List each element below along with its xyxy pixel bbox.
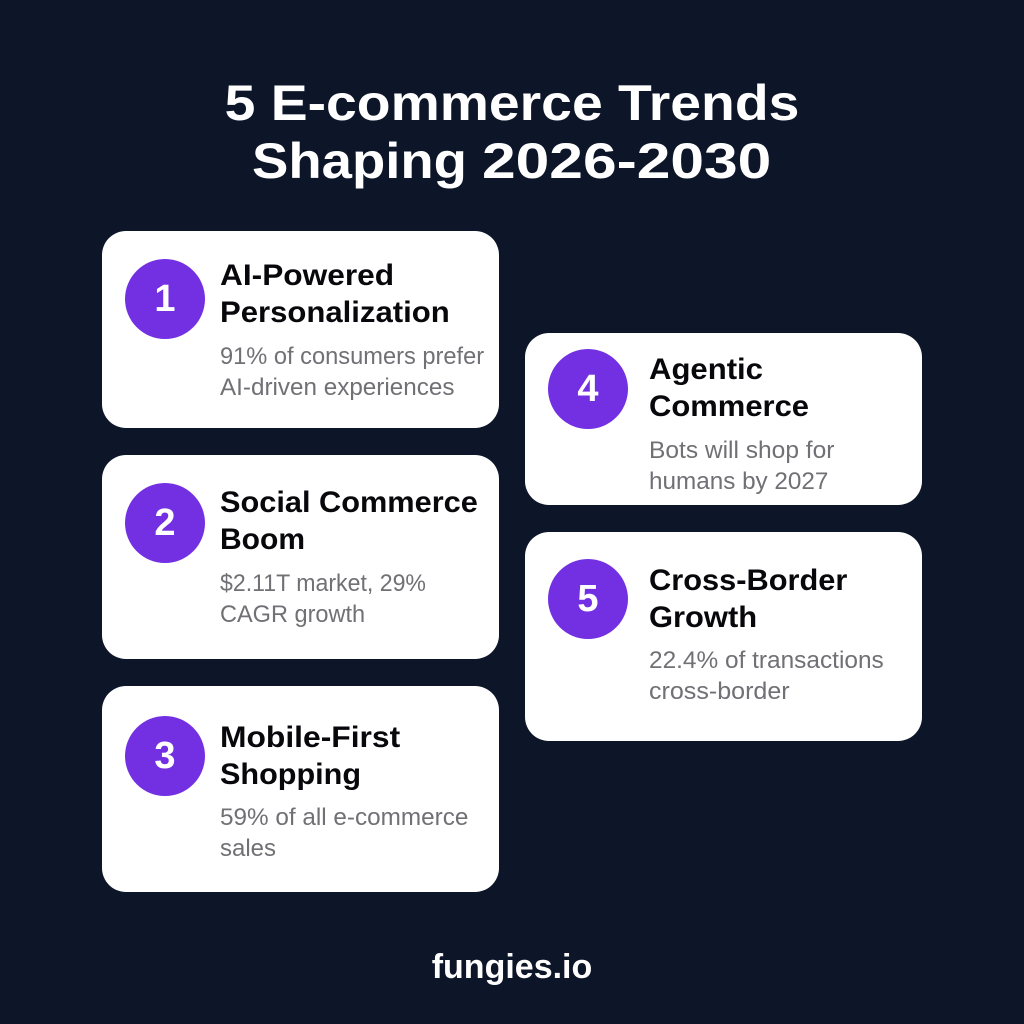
heading 2 [220,486,478,556]
description 2: CAGR growth [220,601,365,628]
title: 5 E-commerce Trends [225,75,799,131]
description 3 [220,804,468,862]
badge 4: 4 [577,368,599,410]
heading 4: Agentic [649,353,763,386]
description 1: 91% of consumers prefer [220,343,484,370]
description 5: 22.4% of transactions [649,647,884,674]
heading 4 [649,353,809,423]
badge 1 [125,259,205,339]
badge 3 [125,716,205,796]
heading 5 [649,564,847,634]
heading 4: Commerce [649,390,809,423]
heading 2: Boom [220,523,305,556]
badge 1: 1 [154,278,176,320]
title [225,75,799,189]
description 3: 59% of all e-commerce [220,804,468,831]
title: Shaping [252,133,467,189]
panel: trend 5 [525,532,922,741]
badge 3: 3 [154,735,176,777]
description 3: sales [220,835,276,862]
description 1: AI-driven experiences [220,374,454,401]
badge 5: 5 [577,578,599,620]
panel: trend 4 [525,333,922,505]
heading 1: Personalization [220,296,450,329]
panel: trend 3 [102,686,499,892]
heading 2: Social Commerce [220,486,478,519]
description 4: humans by 2027 [649,468,828,495]
heading 5: Cross-Border [649,564,847,597]
footer brand: fungies.io [432,948,592,986]
heading 1 [220,259,450,329]
badge 2: 2 [154,502,176,544]
heading 3 [220,721,400,791]
title: 2026-2030 [482,133,771,189]
panel: trend 2 [102,455,499,659]
heading 3: Mobile-First [220,721,400,754]
heading 1: AI-Powered [220,259,394,292]
badge 4 [548,349,628,429]
description 5: cross-border [649,678,790,705]
description 2 [220,570,426,628]
description 2: $2.11T market, 29% [220,570,426,597]
description 4: Bots will shop for [649,437,834,464]
heading 3: Shopping [220,758,361,791]
badge 5 [548,559,628,639]
description 5 [649,647,884,705]
panel: trend 1 [102,231,499,428]
badge 2 [125,483,205,563]
heading 5: Growth [649,601,757,634]
description 4 [649,437,834,495]
description 1 [220,343,484,401]
